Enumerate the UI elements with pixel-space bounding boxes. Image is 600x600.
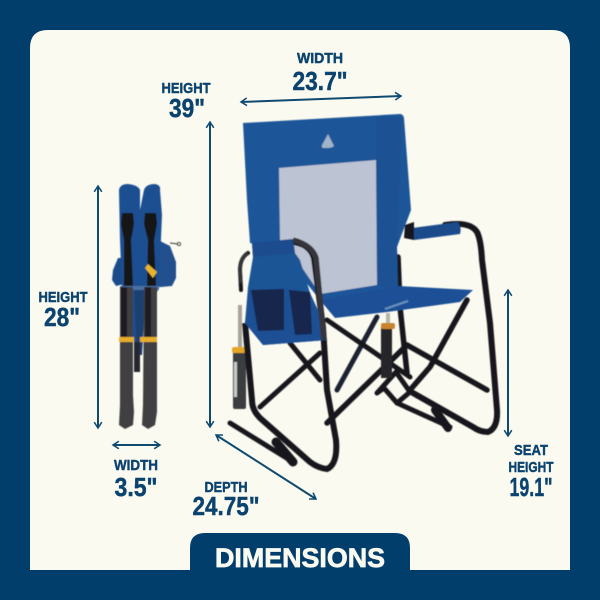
title tab [190, 533, 410, 573]
folded chair [112, 184, 181, 429]
label: seat height [508, 442, 554, 502]
label: chair height [162, 80, 210, 123]
label: folded height: 28" [44, 302, 80, 332]
label: seat height: HEIGHT [508, 459, 554, 476]
label: folded width: 3.5" [114, 472, 158, 502]
rear frame [230, 224, 497, 462]
seat [320, 286, 473, 318]
label: folded height: HEIGHT [38, 289, 88, 306]
mesh panel [279, 160, 377, 294]
cooler bag [245, 239, 327, 345]
label: chair width: 23.7" [292, 66, 348, 96]
label: chair height: 39" [169, 93, 205, 123]
backrest [243, 114, 411, 300]
label: depth: 24.75" [192, 491, 260, 521]
label: chair width: WIDTH [297, 50, 343, 67]
arrow: chair height [209, 122, 211, 427]
label: folded width [114, 457, 158, 502]
gas shocks [232, 305, 395, 409]
label: folded height [38, 289, 88, 332]
label: depth: DEPTH [204, 479, 248, 496]
front frame [245, 242, 336, 469]
arrow: depth [216, 435, 316, 499]
arrow: folded height [97, 186, 99, 428]
label: chair height: HEIGHT [162, 80, 210, 97]
label: chair width [292, 50, 348, 96]
arrow: folded width [113, 444, 160, 446]
label: depth [192, 479, 260, 521]
title tab: DIMENSIONS [215, 543, 385, 573]
logo [322, 134, 334, 148]
label: seat height: 19.1" [510, 472, 552, 502]
label: seat height: SEAT [514, 442, 548, 459]
right arm pad [411, 222, 461, 240]
main chair [230, 114, 497, 469]
label: folded width: WIDTH [114, 457, 158, 474]
arrow: chair width [241, 96, 401, 102]
arrow: seat height [507, 290, 509, 436]
